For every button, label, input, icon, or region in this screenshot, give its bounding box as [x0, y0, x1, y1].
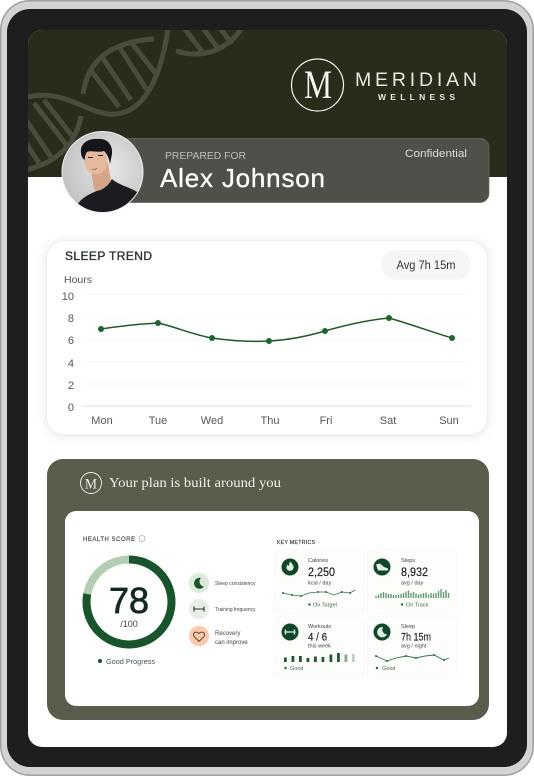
metric: workouts: Good	[290, 666, 303, 672]
y axis title: Hours	[64, 274, 92, 286]
plan heading: Your plan is built around you	[109, 476, 281, 491]
score ring: 78	[109, 580, 149, 621]
chart heading: SLEEP TREND	[65, 249, 152, 263]
y axis labels: 8	[68, 313, 74, 325]
panel: sleep trend	[46, 240, 488, 435]
sleep line chart	[98, 315, 455, 344]
factor: recovery: Recovery	[215, 631, 240, 637]
logo subtitle: WELLNESS	[378, 92, 455, 102]
health score heading	[83, 536, 145, 543]
factor: sleep consistency	[189, 573, 256, 593]
metric: sleep: avg / night	[401, 644, 427, 650]
health score heading: HEALTH SCORE	[83, 537, 135, 543]
metric: calories: Calories	[308, 558, 328, 564]
confidential label: Confidential	[405, 148, 467, 160]
client name: Alex Johnson	[160, 163, 325, 193]
key metrics heading: KEY METRICS	[277, 540, 316, 546]
y axis labels: 0	[68, 402, 74, 414]
panel: plan	[47, 459, 489, 720]
factor: sleep consistency: Sleep consistency	[215, 581, 256, 587]
DNA helix decoration	[20, 26, 243, 171]
health score section	[83, 536, 256, 666]
plan heading icon	[80, 472, 102, 494]
metric: workouts: Workouts	[308, 624, 331, 630]
logo	[292, 59, 477, 111]
y axis labels	[62, 291, 74, 414]
average pill: Avg 7h 15m	[396, 260, 456, 272]
metric: workouts	[275, 617, 364, 677]
x axis labels: Mon	[91, 415, 113, 427]
metric: sleep: 7h 15m	[401, 632, 431, 644]
metric: steps: 8,932	[401, 567, 428, 579]
metric: sleep	[367, 617, 457, 677]
metric: steps: Steps	[401, 558, 415, 564]
score ring: /100	[120, 619, 138, 629]
good progress status: Good Progress	[106, 657, 155, 666]
logo mark: M	[304, 62, 332, 107]
factor: recovery: can improve	[215, 640, 248, 646]
metric: steps	[367, 550, 457, 613]
score ring	[86, 560, 172, 644]
x axis labels: Wed	[201, 415, 223, 427]
avatar portrait	[62, 131, 144, 214]
plan heading icon: M	[85, 476, 97, 492]
factor: recovery	[189, 626, 248, 646]
dashboard card	[65, 511, 479, 706]
metric: steps: On Track	[406, 602, 429, 608]
logo mark	[292, 59, 344, 111]
y axis labels: 4	[68, 358, 74, 370]
factor: training frequency	[189, 599, 256, 619]
metric: calories: kcal / day	[308, 580, 331, 586]
prepared for label: PREPARED FOR	[165, 151, 246, 162]
metric: calories: 2,250	[308, 567, 335, 579]
metric: calories	[275, 550, 364, 613]
x axis labels: Thu	[261, 415, 279, 427]
metric: workouts: this week	[308, 644, 331, 650]
x axis labels: Sat	[380, 415, 396, 427]
key metrics section	[275, 540, 457, 677]
name banner	[100, 138, 489, 202]
y axis labels: 10	[62, 291, 74, 303]
header band	[20, 26, 507, 177]
logo wordmark: MERIDIAN	[355, 69, 477, 91]
metric: calories: On Target	[313, 602, 338, 608]
x axis labels: Tue	[149, 415, 167, 427]
x axis labels	[91, 415, 459, 427]
metric: sleep: Good	[382, 666, 395, 672]
metric: steps: avg / day	[401, 580, 424, 586]
average pill	[381, 250, 471, 280]
y axis labels: 6	[68, 335, 74, 347]
y axis labels: 2	[68, 380, 74, 392]
metric: sleep: Sleep	[401, 624, 415, 630]
x axis labels: Sun	[439, 415, 459, 427]
x axis labels: Fri	[320, 415, 332, 427]
metric: workouts: 4 / 6	[308, 632, 327, 644]
factor: training frequency: Training frequency	[215, 607, 256, 613]
